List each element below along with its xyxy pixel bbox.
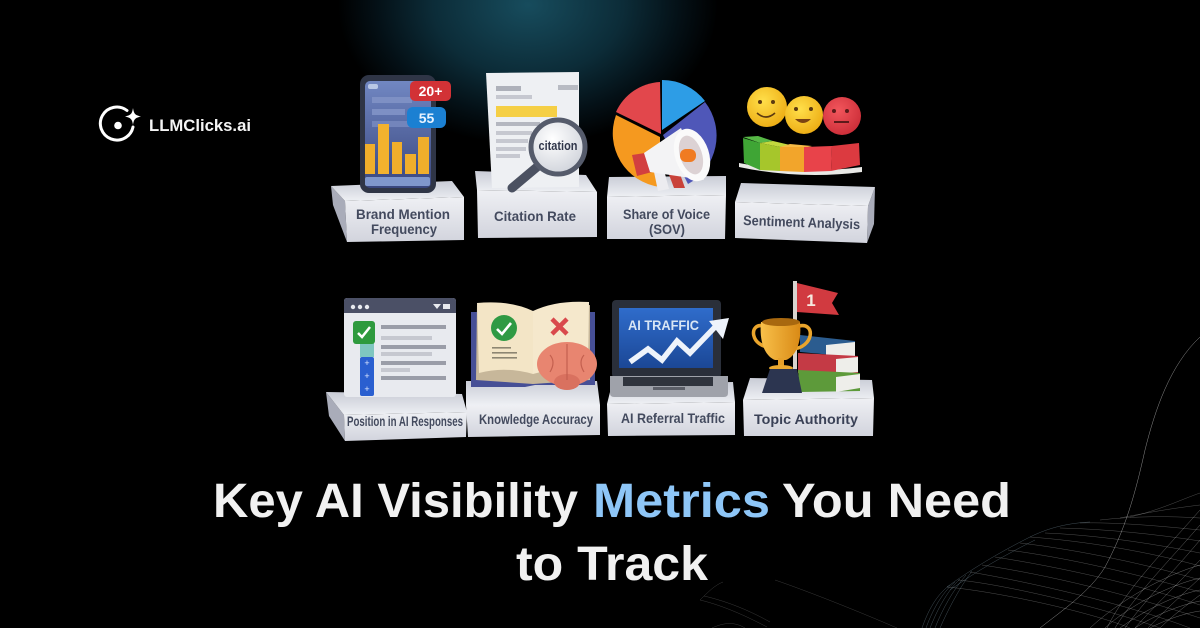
plinth — [743, 378, 874, 436]
label: (SOV) — [649, 221, 685, 237]
plinth — [475, 171, 597, 238]
icon: browser window ranking: + — [364, 358, 370, 368]
label — [623, 206, 710, 237]
plinth — [326, 392, 467, 441]
title: Key AI Visibility — [213, 475, 578, 528]
plinth — [607, 176, 726, 239]
icon: browser window ranking: + — [364, 384, 370, 394]
label: Sentiment Analysis — [743, 212, 861, 232]
icon: browser window ranking — [344, 298, 456, 397]
label: Frequency — [371, 221, 437, 237]
plinth — [466, 381, 600, 437]
panel: Knowledge Accuracy — [466, 302, 600, 437]
label: Position in AI Responses — [347, 413, 463, 429]
title — [213, 475, 1011, 591]
label: Knowledge Accuracy — [479, 411, 593, 427]
icon: laptop with traffic arrow: AI TRAFFIC — [628, 318, 699, 333]
wave mesh decoration — [700, 337, 1200, 628]
label — [356, 206, 450, 237]
icon: browser window ranking: + — [364, 371, 370, 381]
icon: emoji faces — [747, 87, 861, 135]
icon: phone with bar chart: 20+ — [419, 83, 442, 99]
title: You Need — [782, 475, 1011, 528]
plinth — [331, 181, 464, 242]
icon: document with magnifier — [486, 72, 585, 188]
label: Share of Voice — [623, 206, 710, 222]
icon: document with magnifier: citation — [538, 139, 578, 153]
icon: phone with bar chart — [360, 75, 451, 193]
icon: flag, trophy and books: 1 — [806, 291, 816, 310]
plinth — [607, 382, 735, 436]
icon: flag, trophy and books — [754, 281, 860, 393]
title: to Track — [516, 538, 708, 591]
logo wordmark: LLMClicks.ai — [149, 117, 251, 135]
panel: Sentiment Analysis — [735, 87, 875, 243]
panel: Topic Authority — [743, 281, 874, 436]
logo: LLMClicks.ai — [100, 107, 251, 140]
label: Brand Mention — [356, 206, 450, 222]
panel: Citation Rate — [475, 72, 597, 238]
panel: AI Referral Traffic — [607, 300, 735, 436]
label: Topic Authority — [754, 411, 858, 427]
panel: Share of Voice — [607, 80, 726, 239]
icon: logo ring and spark — [100, 107, 141, 140]
icon: sentiment gauge — [739, 136, 862, 175]
label: AI Referral Traffic — [621, 410, 725, 426]
title: Metrics — [593, 475, 770, 528]
panel: Brand Mention Frequency — [331, 75, 464, 242]
icon: open book with brain — [471, 302, 597, 390]
icon: pie chart with megaphone — [613, 80, 717, 191]
icon: phone with bar chart: 55 — [419, 110, 434, 126]
label: Citation Rate — [494, 208, 576, 224]
plinth — [735, 183, 875, 243]
panel: Position in AI Responses — [326, 298, 467, 441]
